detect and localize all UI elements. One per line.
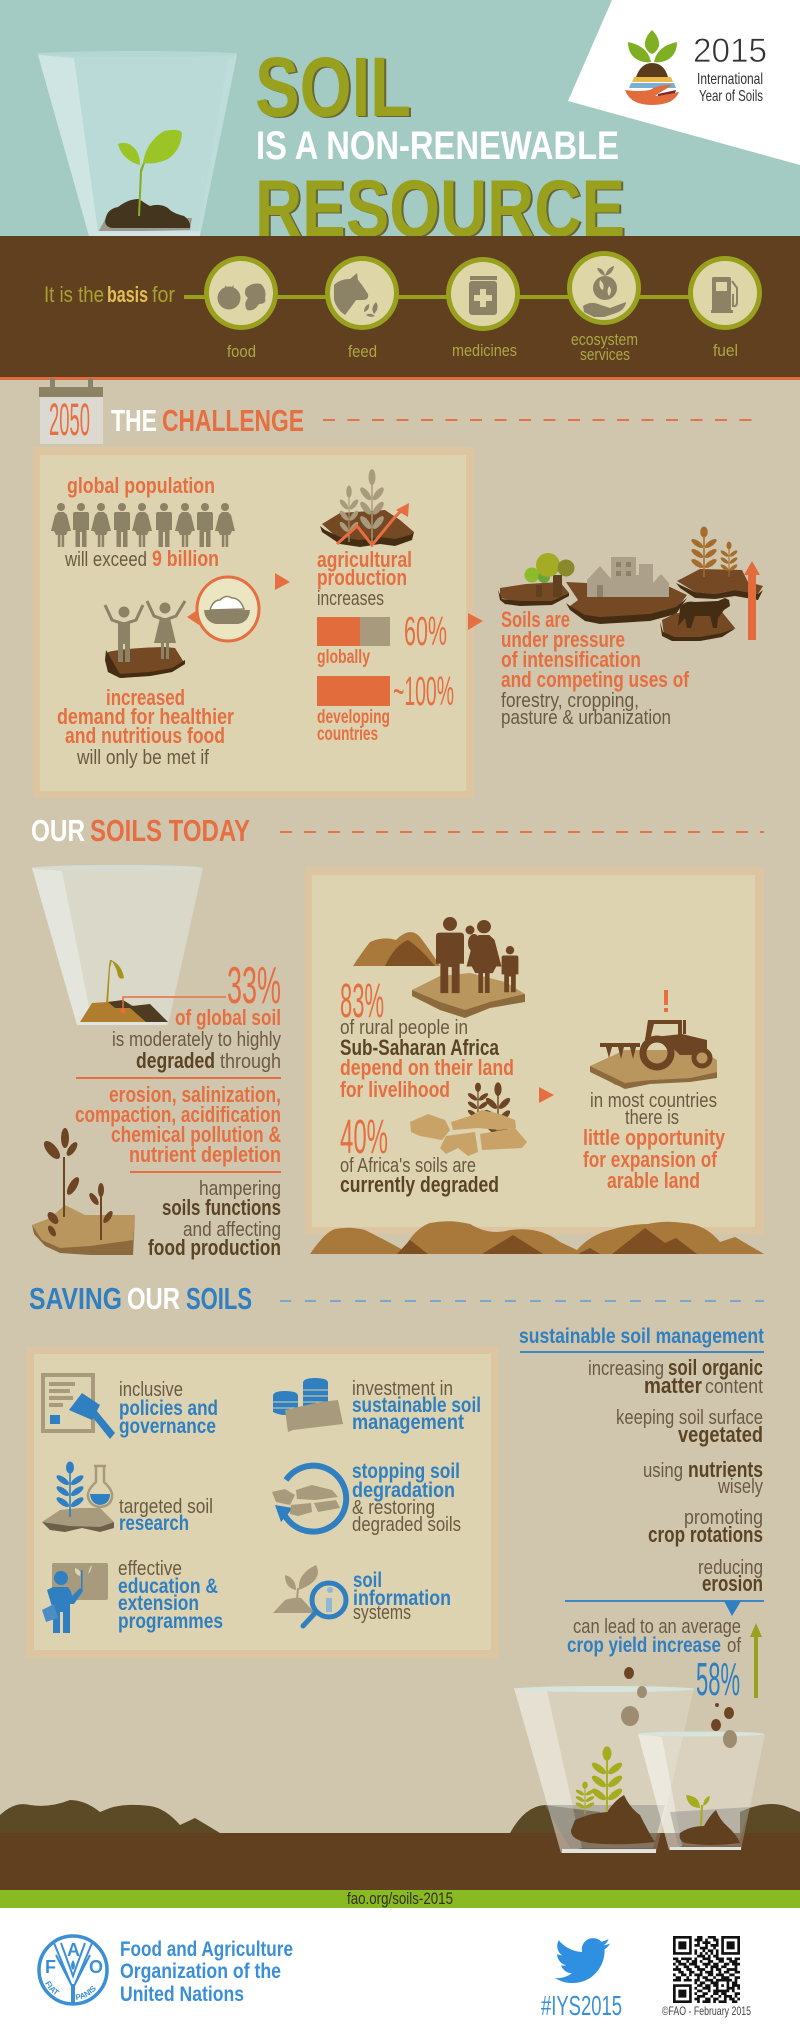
text: will exceed 9 billion: will exceed <box>64 549 147 571</box>
text: little opportunity: there is <box>625 1107 679 1129</box>
text: causes of degradation: compaction, acidification <box>75 1102 281 1127</box>
heading: our soils today: SOILS TODAY <box>90 813 250 848</box>
icon: fuel <box>688 256 762 330</box>
logo: International Year of Soils <box>625 30 767 105</box>
text: soils under pressure: pasture & urbanization <box>501 707 671 729</box>
text: soils under pressure: and competing uses of <box>501 667 690 692</box>
item: research: targeted soil <box>119 1496 213 1518</box>
text: hashtag: #IYS2015 <box>541 1990 622 2021</box>
logo: FAO: FIAT <box>45 1980 60 1995</box>
callout: crop yield increase 58% <box>565 1600 764 1705</box>
text: hampering soils functions <box>148 1178 281 1260</box>
item: education: programmes <box>118 1609 223 1633</box>
text: global population: global population <box>67 473 215 498</box>
bar: globally 60%: 60% <box>404 608 447 654</box>
text: 33% of global soil degraded <box>112 957 281 1073</box>
item: soil information systems: soil <box>353 1568 382 1592</box>
text: hampering soils functions: hampering <box>199 1178 281 1200</box>
panel: challenge <box>33 447 474 798</box>
illustration: small glass with seedling <box>638 1703 765 1850</box>
logo: FAO: A <box>67 1940 80 1960</box>
QR code <box>673 1937 740 2002</box>
column: sustainable soil management: nutrients <box>688 1457 763 1482</box>
divider: orange stripe <box>0 377 800 380</box>
text: little opportunity: little opportunity <box>583 1125 726 1150</box>
labels: basis list: feed <box>348 342 377 361</box>
bar: globally 60%: globally <box>317 647 370 668</box>
logo: FAO <box>37 1934 109 2006</box>
callout: crop yield increase 58%: crop yield increase <box>567 1633 721 1657</box>
labels: basis list: fuel <box>713 341 738 360</box>
text: little opportunity: for expansion of <box>583 1147 718 1172</box>
text: 83% rural people: of rural people in <box>340 1017 468 1039</box>
text: 40% African soils <box>340 1111 499 1197</box>
item: policies and governance: inclusive <box>119 1379 183 1401</box>
logo: International Year of Soils: Year of Soils <box>699 88 763 105</box>
logo: International Year of Soils: 2015 <box>693 32 767 70</box>
icon: calendar 2050 <box>39 378 103 445</box>
logo corner panel <box>568 0 800 165</box>
text: 83% rural people: for livelihood <box>340 1077 450 1102</box>
item: stopping soil degradation <box>272 1459 461 1536</box>
callout: crop yield increase 58%: 58% <box>696 1653 740 1705</box>
text: 40% African soils: of Africa's soils are <box>340 1155 476 1177</box>
illustration: distant hills <box>0 1800 800 1833</box>
illustration: sparse plants on dry soil <box>32 1128 135 1255</box>
text: agricultural production increases <box>317 547 412 610</box>
item: stopping soil degradation: & restoring <box>352 1497 435 1519</box>
item: investment: sustainable soil <box>352 1393 481 1417</box>
text: 33% of global soil degraded: is moderately to highly <box>112 1029 281 1051</box>
text: 33% of global soil degraded: degraded <box>136 1048 215 1073</box>
bar: developing countries ~100%: developing <box>317 707 390 728</box>
text: FAO name: United Nations <box>120 1983 244 2006</box>
item: education: extension <box>118 1591 199 1615</box>
panel: challenge: ~100% <box>393 668 454 714</box>
icon: people on soil with raised arms <box>105 601 185 678</box>
illustration: glass with wilted plant <box>32 865 226 1025</box>
arrow: yield up <box>750 1623 762 1698</box>
illustration: eroded hills <box>310 1221 764 1254</box>
text: copyright: ©FAO - February 2015 <box>662 2004 751 2018</box>
text: increased demand <box>57 685 234 769</box>
bar: developing countries ~100%: countries <box>317 724 378 745</box>
footer: white area <box>0 1908 800 2032</box>
item: education <box>42 1558 223 1633</box>
title: soil is a non-renewable resource: RESOURCE <box>257 165 627 255</box>
icon: food bowl bubble <box>187 577 259 641</box>
text: 83% rural people: 83% <box>340 975 384 1028</box>
arrow: to agricultural production <box>275 573 290 590</box>
item: stopping soil degradation: degradation <box>352 1478 455 1502</box>
footer: green link bar <box>0 1889 800 1908</box>
text: 33% of global soil degraded: of global soil <box>175 1005 281 1030</box>
title: soil is a non-renewable resource: IS A NON-RENEWABLE <box>256 124 619 168</box>
column: sustainable soil management: keeping soil surface <box>616 1407 763 1429</box>
icon: row of people <box>51 503 235 547</box>
text: will exceed 9 billion <box>64 546 219 571</box>
heading: our soils today: OUR <box>31 813 85 848</box>
item: stopping soil degradation: degraded soils <box>352 1514 461 1536</box>
column: sustainable soil management: promoting <box>684 1507 763 1529</box>
text: 40% African soils: 40% <box>340 1111 388 1164</box>
text: soils under pressure <box>501 607 690 729</box>
item: soil information systems: systems <box>353 1602 411 1624</box>
callout: crop yield increase 58%: can lead to an average <box>573 1616 741 1638</box>
text: soils under pressure: forestry, cropping, <box>501 690 639 712</box>
text: 83% rural people <box>340 975 514 1102</box>
footer: green link bar: fao.org/soils-2015 <box>347 1889 453 1908</box>
heading: our soils today <box>31 813 250 848</box>
logo: FAO: O <box>89 1957 103 1977</box>
item: policies and governance <box>43 1375 218 1439</box>
text: will exceed 9 billion: 9 billion <box>152 546 219 571</box>
column: sustainable soil management: crop rotations <box>648 1522 763 1547</box>
arrow: to soils under pressure <box>468 613 483 630</box>
logo: International Year of Soils: International <box>697 71 763 88</box>
column: sustainable soil management: increasing <box>588 1358 664 1380</box>
icon: medicines <box>446 257 520 331</box>
column: sustainable soil management: wisely <box>717 1476 763 1498</box>
text: increased demand: will only be met if <box>76 747 209 769</box>
illustration: competing land uses <box>498 526 763 641</box>
illustration: glass with seedling <box>37 51 237 236</box>
icon: food <box>204 256 278 330</box>
header: sky band <box>0 0 800 236</box>
text: hampering soils functions: soils functions <box>162 1195 281 1220</box>
text: increased demand: demand for healthier <box>57 704 234 729</box>
text: little opportunity: in most countries <box>590 1090 717 1112</box>
item: stopping soil degradation: stopping soil <box>352 1459 460 1483</box>
heading: saving our soils: SAVING <box>29 1281 122 1316</box>
heading: the challenge: THE <box>111 403 157 438</box>
text: causes of degradation <box>75 1082 281 1167</box>
icon: tractor on land <box>590 990 717 1089</box>
icon: calendar 2050: 2050 <box>49 394 90 445</box>
item: education: effective <box>118 1558 182 1580</box>
item: research <box>42 1461 213 1535</box>
illustration: large glass with crops <box>514 1667 694 1853</box>
panel: saving our soils <box>26 1347 499 1658</box>
text: agricultural production increases: agricultural <box>317 547 412 572</box>
text: little opportunity <box>583 1090 726 1193</box>
title: soil is a non-renewable resource <box>255 40 627 255</box>
text: little opportunity: arable land <box>607 1168 700 1193</box>
text: it is the basis for: basis <box>107 282 148 307</box>
column: sustainable soil management: vegetated <box>678 1422 763 1447</box>
icon: twitter bird <box>555 1938 610 1983</box>
icon: crops on soil with rising arrow <box>320 469 414 547</box>
heading: saving our soils <box>29 1281 252 1316</box>
labels: basis list: ecosystem <box>571 330 638 349</box>
heading: the challenge: CHALLENGE <box>162 403 304 438</box>
text: increased demand: increased <box>106 685 185 710</box>
band: brown soil <box>0 236 800 377</box>
item: investment: management <box>352 1410 464 1434</box>
icon: feed <box>325 256 399 330</box>
arrow: to tractor <box>539 1087 554 1103</box>
text: causes of degradation: nutrient depletion <box>129 1142 281 1167</box>
item: education: education & <box>118 1574 218 1598</box>
column: sustainable soil management <box>519 1324 764 1596</box>
title: soil is a non-renewable resource: SOIL <box>257 41 413 135</box>
logo: FAO: PANIS <box>76 1986 96 2000</box>
column: sustainable soil management: using <box>643 1460 683 1482</box>
logo: FAO: F <box>45 1957 56 1977</box>
text: causes of degradation: erosion, salinization, <box>109 1082 281 1107</box>
column: sustainable soil management: content <box>705 1376 763 1398</box>
labels: basis list <box>227 330 738 364</box>
text: 33% of global soil degraded: 33% <box>227 957 281 1015</box>
text: FAO name: Food and Agriculture <box>120 1938 293 1961</box>
text: it is the basis for: It is the <box>44 282 104 307</box>
column: sustainable soil management: soil organic <box>668 1355 763 1380</box>
labels: basis list: food <box>227 342 256 361</box>
heading: saving our soils: OUR <box>127 1281 180 1316</box>
panel: soils today <box>305 867 764 1234</box>
column: sustainable soil management: erosion <box>702 1571 763 1596</box>
text: hampering soils functions: and affecting <box>183 1219 281 1241</box>
text: causes of degradation: chemical pollution & <box>111 1122 281 1147</box>
text: 83% rural people: Sub-Saharan Africa <box>340 1035 500 1060</box>
text: FAO name <box>120 1938 293 2006</box>
column: sustainable soil management: matter <box>644 1373 702 1398</box>
text: 33% of global soil degraded: through <box>220 1051 281 1073</box>
text: hampering soils functions: food production <box>148 1235 281 1260</box>
title: soil is a non-renewable resource: RESOURCE <box>255 164 625 254</box>
band: bottom soil <box>0 1833 800 1890</box>
icon: ecosystem services <box>567 251 641 325</box>
text: increased demand: and nutritious food <box>65 723 225 748</box>
labels: basis list: services <box>580 345 630 364</box>
labels: basis list: medicines <box>452 341 517 360</box>
icon: family on land <box>353 917 525 1018</box>
item: policies and governance: governance <box>119 1414 216 1438</box>
connector line <box>184 295 740 299</box>
item: investment: investment in <box>352 1378 453 1400</box>
text: 83% rural people: depend on their land <box>340 1055 514 1080</box>
bar: globally 60% <box>317 608 447 668</box>
title: soil is a non-renewable resource: SOIL <box>255 40 411 134</box>
text: soils under pressure: under pressure <box>501 627 625 652</box>
heading: saving our soils: SOILS <box>186 1281 252 1316</box>
column: sustainable soil management: reducing <box>698 1557 763 1579</box>
item: policies and governance: policies and <box>119 1396 218 1420</box>
item: soil information systems <box>273 1565 451 1626</box>
text: agricultural production increases: production <box>317 565 407 590</box>
callout: crop yield increase 58%: of <box>727 1635 741 1657</box>
item: soil information systems: information <box>353 1586 451 1610</box>
text: it is the basis for: for <box>152 282 175 307</box>
text: agricultural production increases: increases <box>317 588 384 610</box>
text: soils under pressure: Soils are <box>501 607 570 632</box>
text: soils under pressure: of intensification <box>501 647 641 672</box>
bar: developing countries ~100% <box>317 668 454 745</box>
icon: cracked soil with plants <box>410 1082 527 1156</box>
item: research: research <box>119 1511 189 1535</box>
heading: the challenge <box>111 403 304 438</box>
text: it is the basis for <box>44 282 175 307</box>
text: FAO name: Organization of the <box>120 1960 281 1983</box>
item: investment <box>273 1378 481 1434</box>
text: 40% African soils: currently degraded <box>340 1172 499 1197</box>
